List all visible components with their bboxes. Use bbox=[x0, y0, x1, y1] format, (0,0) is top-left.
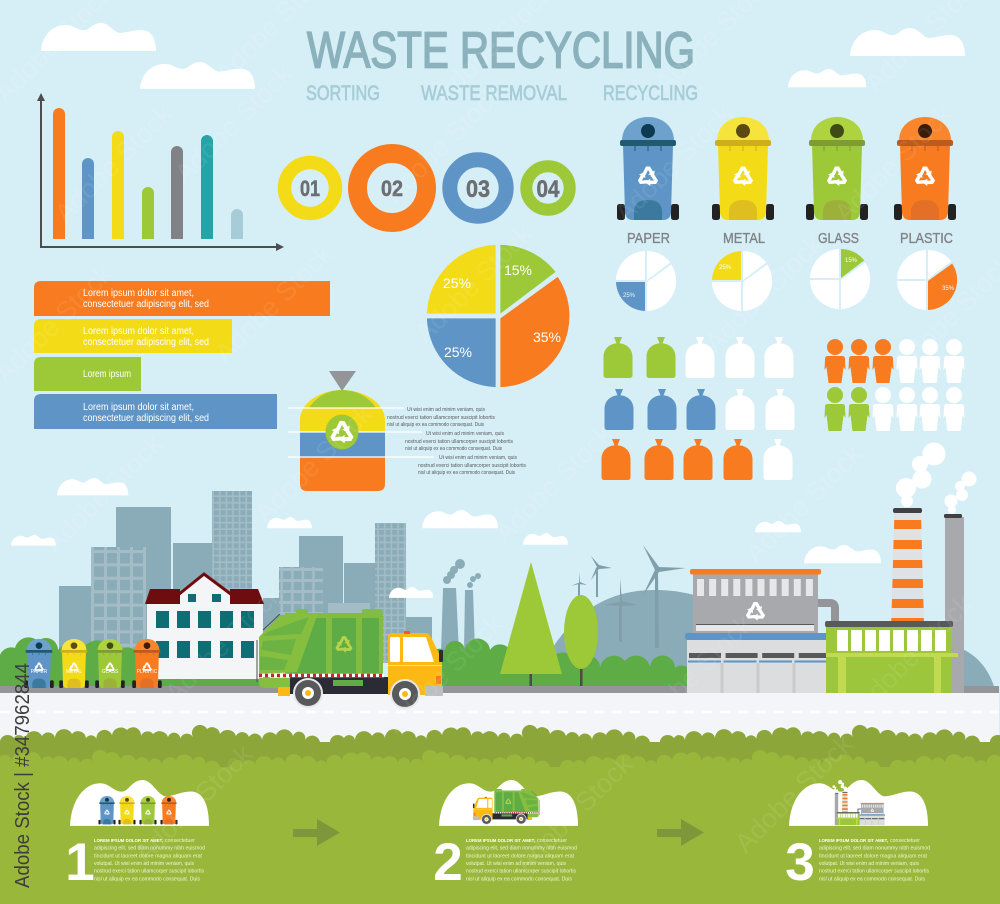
stock id vertical text: Adobe Stock | #347962844 bbox=[12, 663, 34, 888]
hills bbox=[530, 590, 995, 690]
step 2 text: volutpat. Ut wisi enim ad minim veniam, quis bbox=[466, 861, 567, 867]
striped chimney bbox=[891, 508, 924, 622]
bar: blue: consectetuer adipiscing elit, sed bbox=[83, 413, 209, 424]
small pie: glass: 15% bbox=[845, 258, 858, 264]
bag captions bbox=[387, 407, 526, 476]
turbine: small bbox=[591, 556, 612, 597]
bin labels: GLASS bbox=[818, 230, 859, 247]
step 2 text: adipiscing elit, sed diam nonummy nibh euismod bbox=[466, 846, 577, 852]
stock watermark: faint diagonal: Adobe Stock bbox=[609, 99, 739, 228]
pie chart: 15% bbox=[504, 262, 532, 278]
bag captions: nostrud exerci tation ullamcorper suscipit lobortis bbox=[405, 439, 513, 445]
street bin: paper: PAPER bbox=[31, 669, 48, 675]
bar: blue bbox=[34, 394, 277, 429]
stock watermark: faint diagonal: Adobe Stock bbox=[409, 219, 539, 348]
bag pictogram rows bbox=[602, 337, 794, 480]
small pie: metal: 25% bbox=[719, 265, 732, 271]
step 2 cloud with truck bbox=[439, 780, 578, 826]
title: WASTE RECYCLING bbox=[307, 22, 695, 78]
step 3 text: tincidunt ut laoreet dolore magna aliquam erat bbox=[819, 854, 928, 860]
step 1 number: 1 bbox=[65, 833, 95, 892]
bag captions: Ut wisi enim ad minim veniam, quis bbox=[426, 431, 504, 437]
subtitles: RECYCLING bbox=[603, 82, 698, 105]
bin labels: PAPER bbox=[627, 230, 670, 247]
bin labels: PLASTIC bbox=[900, 230, 953, 247]
step 3 text bbox=[819, 838, 930, 882]
small pie: plastic: 35% bbox=[942, 286, 955, 292]
subtitles bbox=[306, 82, 698, 105]
upper grey block bbox=[690, 569, 821, 633]
step 3 cloud with factory bbox=[789, 780, 928, 826]
bin labels bbox=[627, 230, 953, 247]
step 1 text: volutpat. Ut wisi enim ad minim veniam, quis bbox=[94, 861, 195, 867]
recycling factory bbox=[685, 442, 976, 693]
wind turbines bbox=[571, 545, 686, 648]
stock watermark: faint diagonal: Adobe Stock bbox=[489, 419, 619, 548]
stock watermark: faint diagonal: Adobe Stock bbox=[739, 439, 869, 568]
street bins bbox=[24, 639, 162, 688]
pie chart: 25% bbox=[443, 275, 471, 291]
stock watermark: faint diagonal: Adobe Stock bbox=[379, 79, 509, 208]
step 2 text: LOREM IPSUM DOLOR SIT AMET, bbox=[466, 838, 535, 843]
garbage truck bbox=[257, 609, 443, 709]
subtitles: SORTING bbox=[306, 82, 380, 105]
small pie: paper bbox=[616, 251, 676, 311]
pie chart: 25% bbox=[444, 344, 472, 360]
stock watermark: faint diagonal: Adobe Stock bbox=[849, 589, 979, 718]
hedge: dark band bbox=[0, 725, 1000, 810]
people: green row bbox=[824, 387, 964, 431]
ring 04 bbox=[526, 166, 570, 210]
trees bbox=[500, 562, 598, 687]
step 1 text: LOREM IPSUM DOLOR SIT AMET, bbox=[94, 838, 163, 843]
lower plant block bbox=[685, 633, 832, 693]
stock watermark: faint diagonal: Adobe Stock bbox=[699, 229, 829, 358]
stock watermark: faint diagonal: Adobe Stock bbox=[209, 239, 339, 368]
bags: green row bbox=[604, 337, 794, 378]
bar: orange bbox=[34, 281, 330, 316]
street bin: metal: METAL bbox=[66, 669, 82, 675]
street bin: glass: GLASS bbox=[102, 669, 119, 675]
stock watermark: faint diagonal: Adobe Stock bbox=[249, 399, 379, 528]
stock watermark: faint diagonal: Adobe Stock bbox=[39, 429, 169, 558]
tall grey chimney bbox=[944, 514, 964, 693]
pie chart: 35% bbox=[533, 329, 561, 345]
ground strip bbox=[0, 686, 999, 693]
bag captions: Ut wisi enim ad minim veniam, quis bbox=[407, 407, 485, 413]
bar: green: Lorem ipsum bbox=[83, 369, 131, 380]
street bin: plastic: PLASTIC bbox=[137, 669, 158, 675]
step 3 text: nostrud exerci tation ullamcorper suscipit lobortis bbox=[819, 869, 930, 875]
bar chart bbox=[37, 93, 284, 251]
step 1 text bbox=[94, 838, 205, 882]
stock watermark: faint diagonal: Adobe Stock bbox=[379, 609, 509, 738]
stock watermark: faint diagonal: Adobe Stock bbox=[509, 749, 639, 878]
step 2 bbox=[433, 780, 578, 892]
road bbox=[0, 693, 999, 743]
bar: orange: Lorem ipsum dolor sit amet, bbox=[83, 288, 194, 299]
stock watermark: faint diagonal: Adobe Stock bbox=[129, 739, 259, 868]
bar: blue: Lorem ipsum dolor sit amet, bbox=[83, 402, 194, 413]
step 3 text: nisl ut aliquip ex ea commodo consequat. Duis bbox=[819, 876, 926, 882]
step 3 text: consectetuer bbox=[890, 838, 920, 844]
smoke bbox=[896, 442, 976, 514]
step 1 bbox=[65, 780, 209, 892]
green building bbox=[825, 621, 958, 693]
stock watermark: faint diagonal: Adobe Stock bbox=[169, 59, 299, 188]
ring 02: 02 bbox=[381, 176, 403, 201]
bar: yellow: Lorem ipsum dolor sit amet, bbox=[83, 326, 194, 337]
bin labels: METAL bbox=[723, 230, 765, 247]
ring 01 bbox=[284, 162, 336, 214]
step 3 text: volutpat. Ut wisi enim ad minim veniam, quis bbox=[819, 861, 920, 867]
bushes behind town bbox=[0, 637, 690, 690]
stock watermark: faint diagonal: Adobe Stock bbox=[159, 579, 289, 708]
ring 04: 04 bbox=[536, 176, 560, 203]
connecting pipe bbox=[815, 603, 835, 625]
bags: blue row bbox=[604, 389, 794, 430]
hedge: light band and meadow bbox=[0, 750, 1000, 904]
turbine: large bbox=[642, 545, 686, 648]
small pie: metal bbox=[712, 251, 772, 311]
step 2 text: tincidunt ut laoreet dolore magna aliquam erat bbox=[466, 854, 575, 860]
bin: glass bbox=[806, 117, 868, 220]
step 1 text: nisl ut aliquip ex ea commodo consequat. Duis bbox=[94, 876, 201, 882]
city skyline bbox=[59, 491, 432, 686]
bag captions: Ut wisi enim ad minim veniam, quis bbox=[439, 455, 517, 461]
arrow 1 bbox=[293, 819, 340, 846]
small pie: paper: 25% bbox=[623, 293, 636, 299]
bag captions: nisl ut aliquip ex ea commodo consequat. Duis bbox=[387, 422, 484, 428]
cloud over city bbox=[389, 587, 433, 598]
small pie: plastic bbox=[897, 250, 957, 310]
ring 02 bbox=[358, 154, 426, 222]
step 2 text: nostrud exerci tation ullamcorper suscipit lobortis bbox=[466, 869, 577, 875]
bag captions: nostrud exerci tation ullamcorper suscipit lobortis bbox=[418, 463, 526, 469]
stock watermark: faint diagonal: Adobe Stock bbox=[49, 99, 179, 228]
stock watermark: faint diagonal: Adobe Stock bbox=[729, 729, 859, 858]
bag captions: nisl ut aliquip ex ea commodo consequat. Duis bbox=[418, 470, 515, 476]
bar: green bbox=[34, 357, 141, 391]
step 2 text: nisl ut aliquip ex ea commodo consequat. Duis bbox=[466, 876, 573, 882]
arrow 2 bbox=[657, 819, 704, 846]
bag captions: nisl ut aliquip ex ea commodo consequat. Duis bbox=[405, 446, 502, 452]
horizontal text bars bbox=[34, 281, 330, 429]
step 2 text: consectetuer bbox=[537, 838, 567, 844]
numbered rings bbox=[284, 154, 570, 222]
people: orange row bbox=[824, 339, 964, 383]
step 1 text: adipiscing elit, sed diam nonummy nibh euismod bbox=[94, 846, 205, 852]
ring 03 bbox=[450, 160, 506, 216]
bag captions: nostrud exerci tation ullamcorper suscipit lobortis bbox=[387, 415, 495, 421]
bags: orange row bbox=[602, 439, 792, 480]
bar: yellow: consectetuer adipiscing elit, sed bbox=[83, 337, 209, 348]
distant chimneys with smoke bbox=[441, 559, 481, 652]
subtitles: WASTE REMOVAL bbox=[421, 82, 567, 105]
turbine: middle bbox=[604, 578, 637, 642]
step 1 text: nostrud exerci tation ullamcorper suscipit lobortis bbox=[94, 869, 205, 875]
ring 03: 03 bbox=[466, 176, 490, 203]
axes bbox=[41, 99, 279, 247]
stock watermark: faint diagonal: Adobe Stock bbox=[629, 609, 759, 738]
bin: metal bbox=[712, 117, 774, 220]
step 1 cloud with bins bbox=[70, 780, 209, 826]
ring 01: 01 bbox=[300, 176, 320, 201]
bar: orange: consectetuer adipiscing elit, sed bbox=[83, 299, 209, 310]
step 1 text: consectetuer bbox=[165, 838, 195, 844]
small pie: glass bbox=[810, 249, 870, 309]
stock watermark: faint diagonal: Adobe Stock bbox=[829, 99, 959, 228]
step 3 text: LOREM IPSUM DOLOR SIT AMET, bbox=[819, 838, 888, 843]
step 3 bbox=[785, 780, 930, 892]
clouds bbox=[11, 23, 965, 563]
step 3 text: adipiscing elit, sed diam nonummy nibh euismod bbox=[819, 846, 930, 852]
step 1 text: tincidunt ut laoreet dolore magna aliquam erat bbox=[94, 854, 203, 860]
people pictogram rows bbox=[824, 339, 964, 431]
turbine: tiny bbox=[571, 572, 587, 597]
house bbox=[145, 574, 264, 679]
bar: yellow bbox=[34, 319, 232, 353]
bin: paper bbox=[617, 117, 679, 220]
bin: plastic bbox=[894, 117, 956, 220]
step 3 number: 3 bbox=[785, 833, 815, 892]
step 2 number: 2 bbox=[433, 833, 463, 892]
recycling bins row bbox=[617, 117, 956, 220]
step 2 text bbox=[466, 838, 577, 882]
segmented garbage bag bbox=[288, 371, 526, 491]
bars bbox=[53, 108, 243, 239]
pie chart bbox=[427, 245, 569, 387]
